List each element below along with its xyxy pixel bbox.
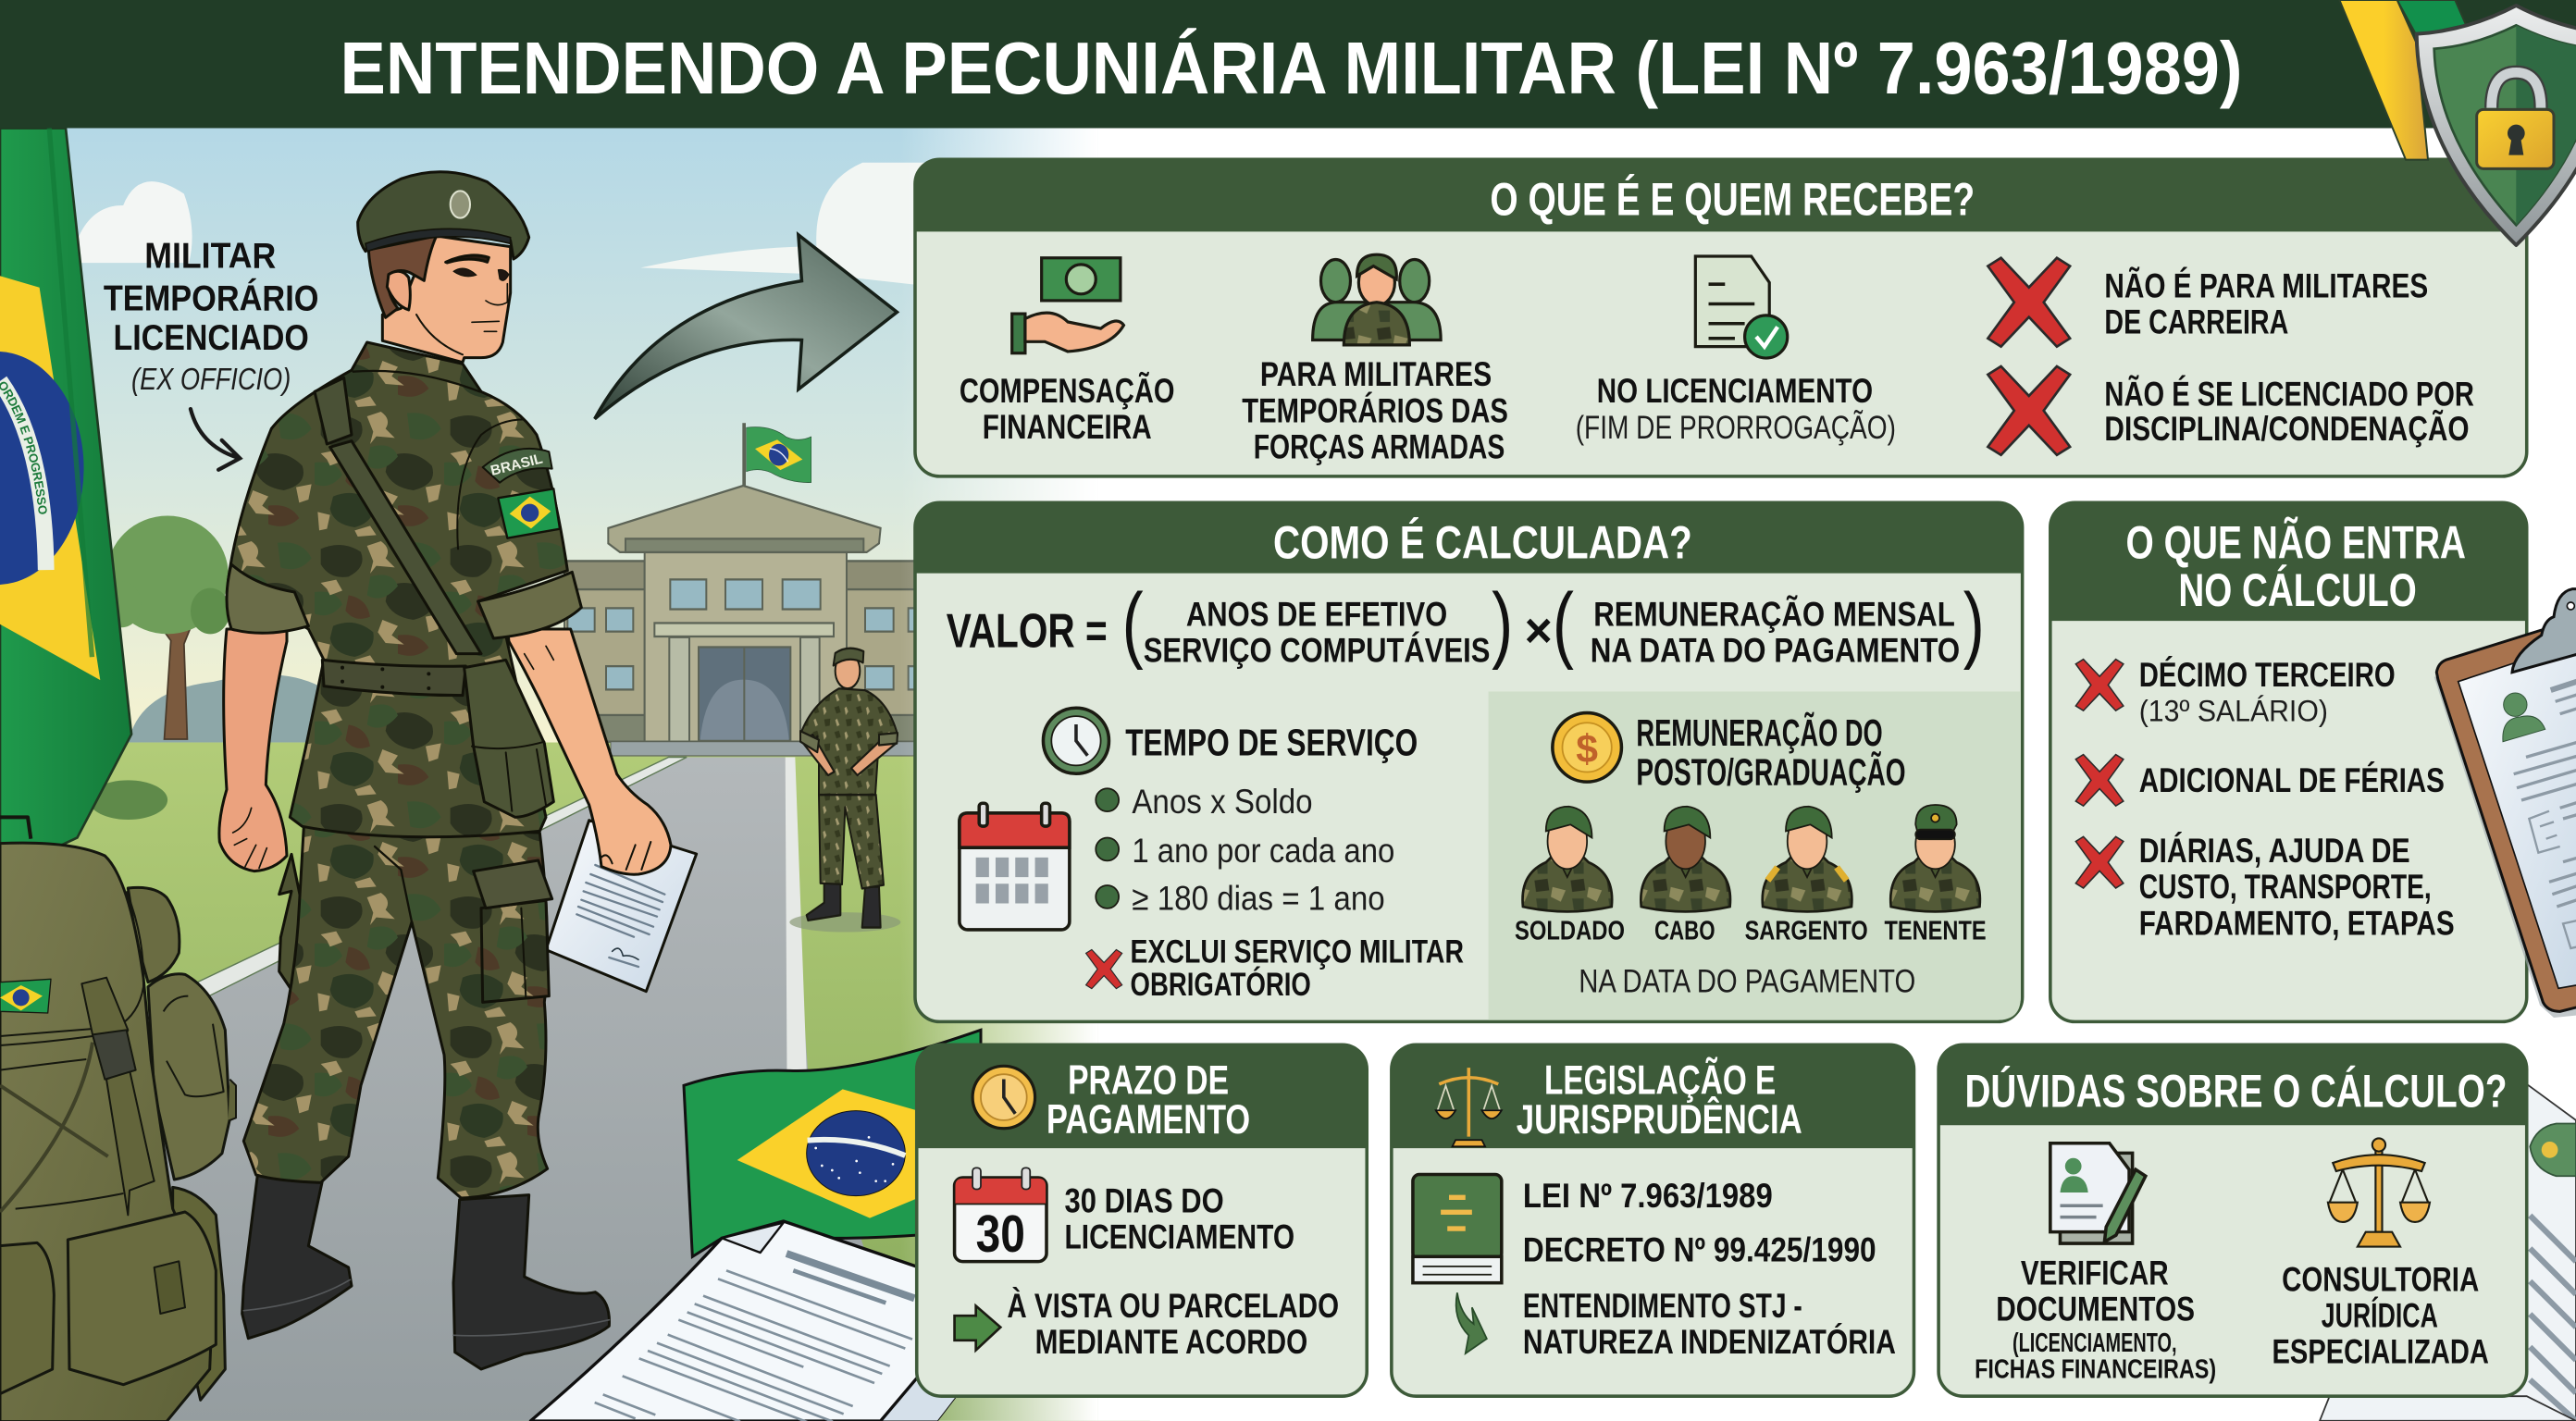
label: militar temporário licenciado: TEMPORÁRIO: [104, 278, 318, 319]
text: à vista: MEDIANTE ACORDO: [1035, 1322, 1307, 1361]
text: à vista: À VISTA OU PARCELADO: [1007, 1286, 1339, 1325]
exclusion: carreira: NÃO É PARA MILITARES: [2104, 266, 2428, 304]
icon: coin: $: [1576, 727, 1598, 772]
panel: legislação e jurisprudência: [1392, 1044, 1913, 1396]
icon: calendar: [960, 803, 1070, 930]
text: 30 dias: 30 DIAS DO: [1065, 1180, 1224, 1219]
icon: curved arrow: [1456, 1292, 1487, 1353]
formula: REMUNERAÇÃO MENSAL: [1593, 594, 1955, 633]
belt and pouch: [322, 660, 553, 817]
rank labels: SOLDADO: [1515, 917, 1625, 946]
rank labels: SARGENTO: [1745, 917, 1868, 946]
heading: PAGAMENTO: [1046, 1097, 1250, 1143]
heading: O QUE NÃO ENTRA: [2126, 517, 2466, 569]
icon: money and hand: [1012, 258, 1123, 353]
panel: prazo de pagamento: [917, 1044, 1367, 1396]
heading: NO CÁLCULO: [2178, 564, 2417, 616]
figure: soldado: [1523, 807, 1612, 911]
formula: ): [1963, 575, 1985, 671]
item: diárias: [2139, 831, 2455, 942]
icon: right documents: [2320, 1084, 2576, 1421]
item: no licenciamento: (FIM DE PRORROGAÇÃO): [1576, 409, 1896, 446]
item: no licenciamento: [1576, 371, 1896, 446]
exclusion: carreira: [2104, 266, 2428, 340]
bottom flag: [684, 1030, 981, 1256]
icon: gold clock: [972, 1066, 1035, 1129]
panel: dúvidas: [1938, 1044, 2527, 1396]
heading: remuneração: POSTO/GRADUAÇÃO: [1636, 751, 1906, 794]
icon: red x férias: [2075, 755, 2124, 806]
item: para militares temporários: TEMPORÁRIOS DAS: [1242, 390, 1508, 429]
heading: O QUE É E QUEM RECEBE?: [1490, 174, 1975, 226]
label: militar temporário licenciado: MILITAR: [144, 236, 276, 276]
icon: coin: [1553, 713, 1621, 782]
formula: ): [1492, 575, 1513, 671]
icon: scales: [1436, 1068, 1502, 1146]
text: entendimento: ENTENDIMENTO STJ -: [1523, 1286, 1802, 1325]
item: consultoria: CONSULTORIA: [2282, 1260, 2479, 1299]
icon: document with check: [1695, 256, 1788, 358]
icon: clock: [1043, 708, 1108, 773]
item: diárias: DIÁRIAS, AJUDA DE: [2139, 831, 2410, 870]
heading: tempo de serviço: TEMPO DE SERVIÇO: [1125, 722, 1418, 764]
icon: red x décimo: [2075, 660, 2124, 710]
item: décimo terceiro: (13º SALÁRIO): [2139, 694, 2328, 727]
icon: military group: [1313, 254, 1441, 345]
text: à vista: [1007, 1286, 1339, 1361]
item: décimo terceiro: DÉCIMO TERCEIRO: [2139, 655, 2396, 694]
soldier illustration: [219, 172, 697, 1369]
icon: red x carreira: [1988, 258, 2070, 347]
rank labels: [1515, 917, 1987, 946]
formula: ANOS DE EFETIVO: [1186, 594, 1447, 633]
item: consultoria: JURÍDICA: [2322, 1296, 2438, 1335]
item: compensação: COMPENSAÇÃO: [960, 371, 1174, 410]
label: militar temporário licenciado: (EX OFFICIO): [131, 362, 291, 397]
item: compensação: FINANCEIRA: [983, 407, 1152, 446]
text: entendimento: NATUREZA INDENIZATÓRIA: [1523, 1322, 1896, 1361]
note: na data do pagamento: NA DATA DO PAGAMENTO: [1579, 962, 1915, 999]
formula: (: [1122, 575, 1144, 671]
icon: small red x: [1086, 949, 1122, 989]
panel: como é calculada: [915, 502, 2023, 1021]
label: militar temporário licenciado: LICENCIADO: [114, 318, 309, 358]
text: leis: DECRETO Nº 99.425/1990: [1523, 1230, 1876, 1269]
text: 30 dias: LICENCIAMENTO: [1065, 1217, 1294, 1255]
exclusion: disciplina: [2104, 375, 2474, 448]
exclusion: disciplina: DISCIPLINA/CONDENAÇÃO: [2104, 409, 2470, 448]
exclusion: serviço obrigatório: EXCLUI SERVIÇO MILITAR: [1131, 933, 1464, 970]
panel: o que não entra: [2050, 502, 2527, 1021]
icon: red x diárias: [2075, 836, 2124, 888]
icon: scales large: [2328, 1138, 2430, 1247]
item: no licenciamento: NO LICENCIAMENTO: [1597, 371, 1873, 410]
text: 30 dias: [1065, 1180, 1294, 1255]
icon: document and pen: [2050, 1143, 2146, 1243]
backpack illustration: [0, 817, 236, 1421]
list: tempo de serviço: 1 ano por cada ano: [1132, 831, 1394, 870]
heading: COMO É CALCULADA?: [1273, 517, 1692, 569]
item: para militares temporários: PARA MILITARES: [1260, 354, 1492, 393]
exclusion: serviço obrigatório: OBRIGATÓRIO: [1131, 966, 1311, 1003]
building: [564, 486, 918, 756]
item: diárias: CUSTO, TRANSPORTE,: [2139, 867, 2432, 906]
item: décimo terceiro: [2139, 655, 2396, 727]
heading: [1046, 1057, 1250, 1143]
text: leis: [1523, 1176, 1876, 1269]
road: [0, 758, 920, 1421]
icon: book: [1413, 1174, 1502, 1283]
figure: cabo: [1641, 807, 1730, 911]
item: diárias: FARDAMENTO, ETAPAS: [2139, 903, 2455, 942]
rank labels: TENENTE: [1885, 917, 1987, 946]
item: para militares temporários: FORÇAS ARMADAS: [1254, 426, 1505, 465]
panel: o que é e quem recebe: [915, 159, 2527, 476]
text: entendimento: [1523, 1286, 1896, 1361]
exclusion: carreira: DE CARREIRA: [2104, 302, 2288, 340]
guard figure: [789, 649, 900, 933]
item: consultoria: ESPECIALIZADA: [2273, 1332, 2489, 1371]
formula: SERVIÇO COMPUTÁVEIS: [1144, 631, 1490, 670]
arrow: large curved: [595, 235, 897, 419]
item: adicional de férias: ADICIONAL DE FÉRIAS: [2139, 760, 2445, 799]
heading: [1517, 1056, 1802, 1143]
item: verificar documentos: [1975, 1253, 2216, 1385]
icon: calendar 30: [955, 1168, 1046, 1264]
figure: tenente: [1890, 805, 1980, 911]
formula: ×: [1525, 604, 1553, 659]
formula: (: [1553, 575, 1574, 671]
icon: red x disciplina: [1988, 366, 2070, 455]
icon: calendar 30: 30: [976, 1205, 1025, 1264]
background scene: [0, 128, 1150, 1421]
heading: PRAZO DE: [1068, 1057, 1229, 1103]
building flag: [742, 423, 811, 486]
figure: sargento: [1763, 807, 1852, 911]
tree: [89, 516, 230, 820]
formula: [947, 575, 1985, 671]
text: leis: LEI Nº 7.963/1989: [1523, 1176, 1773, 1215]
heading: [2126, 517, 2466, 616]
item: verificar documentos: (LICENCIAMENTO,: [2012, 1328, 2177, 1358]
scene fade to white: [900, 128, 2576, 1421]
icon: shield with padlock: [2417, 6, 2576, 245]
rank labels: CABO: [1654, 917, 1715, 946]
heading: JURISPRUDÊNCIA: [1517, 1096, 1802, 1143]
heading: LEGISLAÇÃO E: [1544, 1056, 1776, 1103]
upper body: [227, 172, 581, 837]
list: tempo de serviço: ≥ 180 dias = 1 ano: [1132, 879, 1385, 918]
heading: remuneração: REMUNERAÇÃO DO: [1636, 711, 1883, 754]
item: verificar documentos: VERIFICAR: [2021, 1253, 2169, 1291]
item: compensação: [960, 371, 1174, 446]
bottom documents: [530, 1221, 956, 1421]
exclusion: disciplina: NÃO É SE LICENCIADO POR: [2104, 375, 2474, 414]
lower body: [219, 629, 697, 1369]
upper body: BRASIL: [489, 451, 544, 479]
formula: NA DATA DO PAGAMENTO: [1591, 631, 1960, 670]
item: consultoria: [2273, 1260, 2489, 1371]
list: tempo de serviço: Anos x Soldo: [1132, 782, 1313, 821]
icon: ribbon: [2339, 0, 2466, 160]
exclusion: serviço obrigatório: [1131, 933, 1464, 1003]
header bar: [0, 0, 2576, 128]
item: verificar documentos: DOCUMENTOS: [1996, 1290, 2195, 1328]
item: para militares temporários: [1242, 354, 1508, 465]
list: tempo de serviço: [1096, 782, 1394, 918]
formula: VALOR =: [947, 604, 1108, 658]
label: militar temporário licenciado: [104, 236, 318, 397]
icon: green arrow: [955, 1306, 1000, 1350]
icon: left large flag: [0, 128, 133, 844]
item: verificar documentos: FICHAS FINANCEIRAS): [1975, 1355, 2216, 1385]
heading: remuneração: [1636, 711, 1906, 794]
arrow: label to soldier: [191, 409, 240, 470]
title: ENTENDENDO A PECUNIÁRIA MILITAR (LEI Nº 7.963/1989): [341, 27, 2243, 109]
icon: clipboard: [2434, 589, 2576, 1018]
